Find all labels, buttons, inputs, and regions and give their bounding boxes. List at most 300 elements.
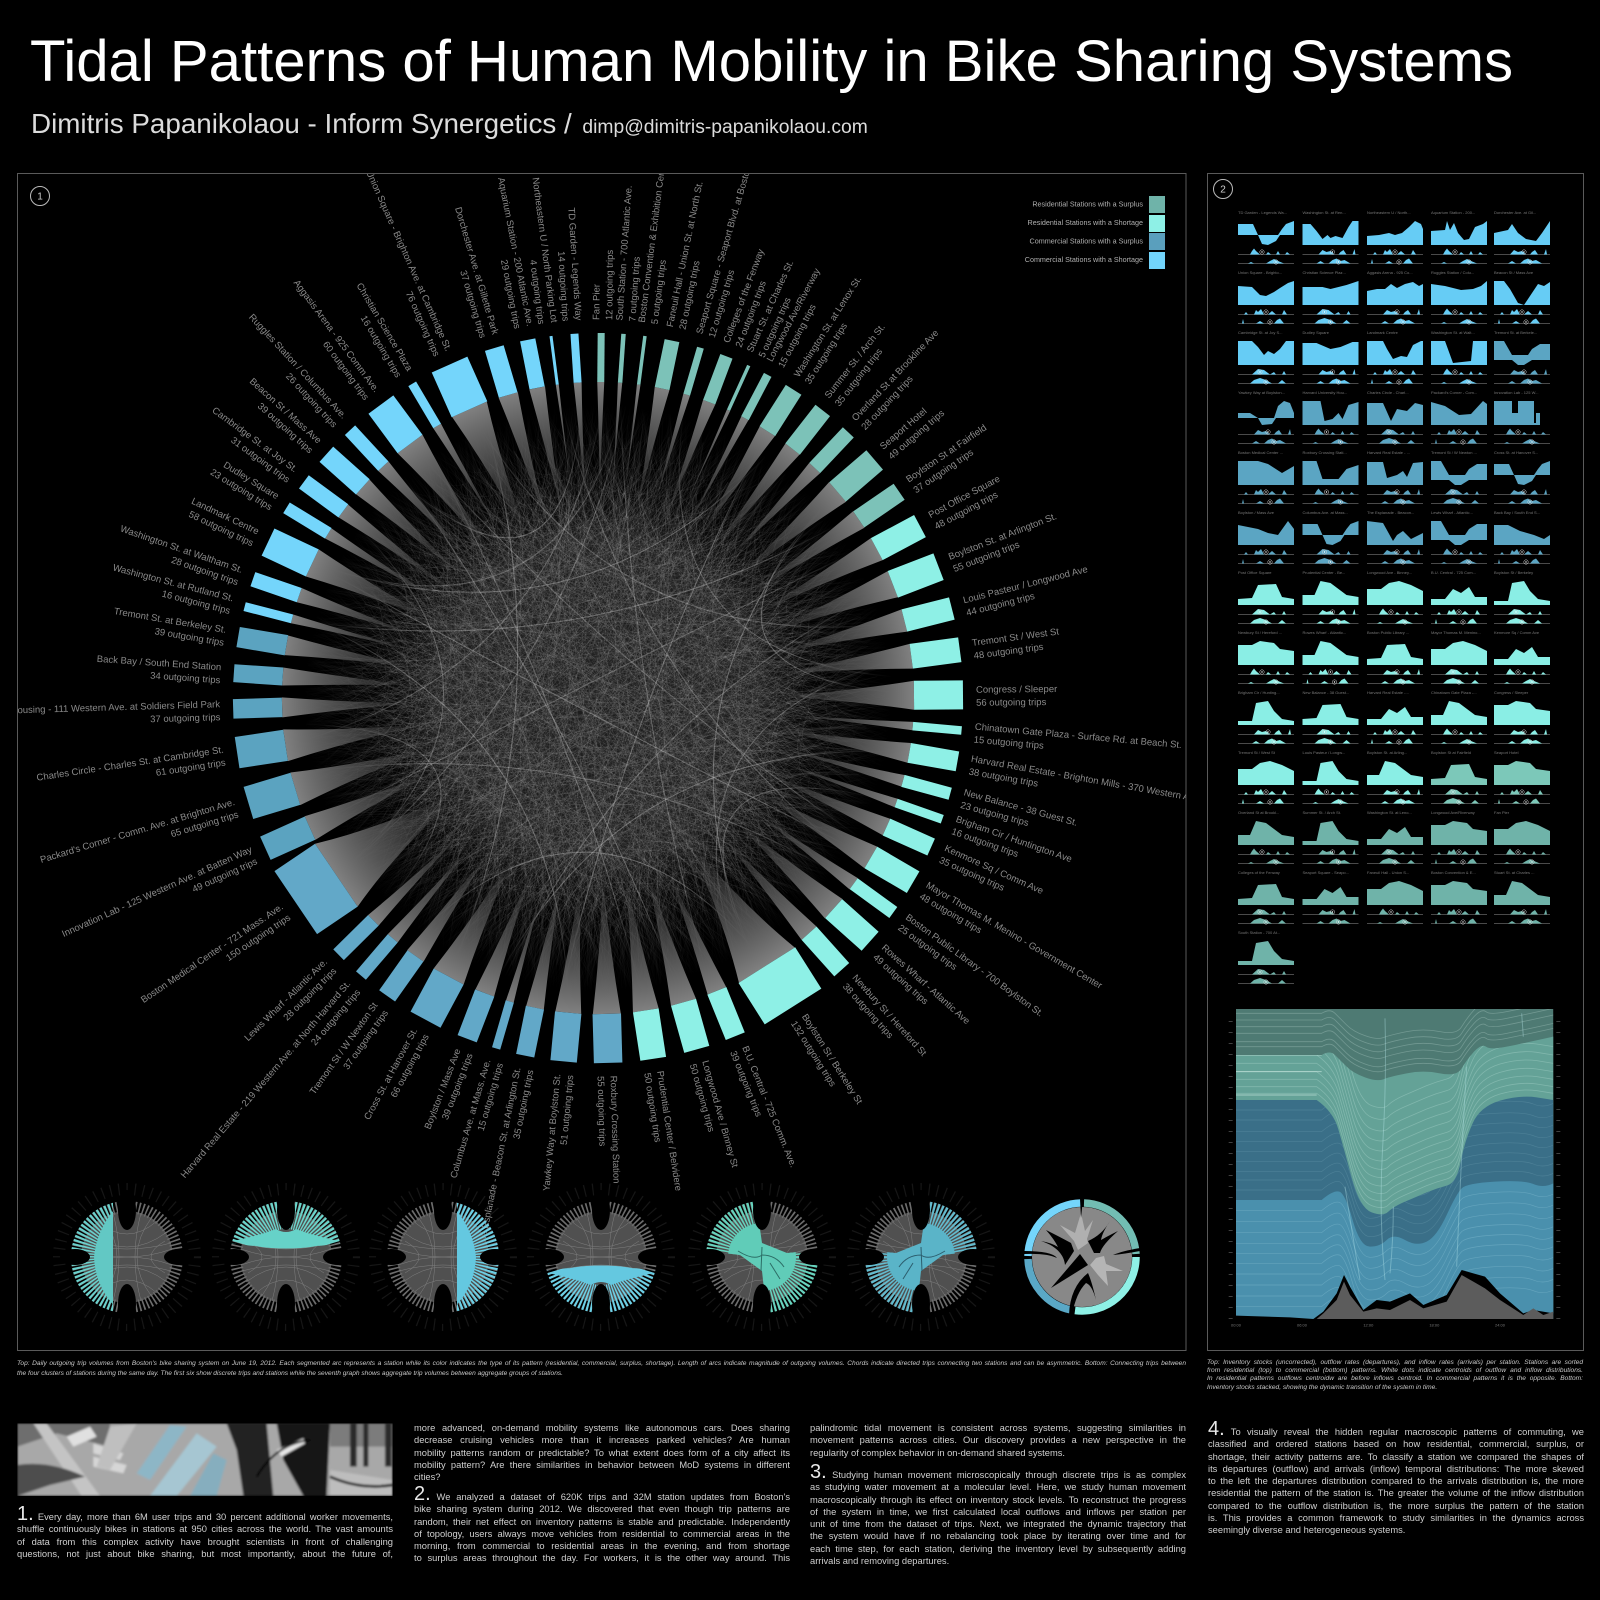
station: South Station: South Station - 700 Atlantic Ave. [614, 185, 635, 321]
small multiples row 8: Mayor Thomas M. Menino... [1431, 630, 1481, 635]
text block 1: of data from this complex activity have brought scientists in front of challenging [17, 1536, 393, 1546]
small multiples row 11: Longwood Ave/Riverway [1431, 810, 1475, 815]
text block 1 continued: mobility patterns random or predictable? To what extent does form of a city affect its [414, 1448, 790, 1458]
station: Dorchester Ave [440, 206, 518, 399]
station: Overland St: Overland St at Brookline Ave [850, 328, 941, 424]
station: Cross St [364, 968, 464, 1119]
photo: bike share dock [17, 1423, 393, 1496]
station: Boylston St / Berkeley St: 132 outgoing trips [788, 1019, 838, 1089]
small multiples row 8: Rowes Wharf - Atlantic... [1302, 630, 1346, 635]
station: Union Square: 76 outgoing trips [403, 290, 442, 359]
station: Ruggles Station: 26 outgoing trips [283, 371, 339, 430]
small multiples row 10: Boylston St. at Arling... [1367, 750, 1407, 755]
text block 1: shuffle continuously bikes in stations at 950 cities across the world. The vast amounts [17, 1524, 393, 1534]
small multiples row 9: Harvard Real Estate -... [1367, 690, 1409, 695]
small multiples row 6: Boylston / Mass Ave [1238, 510, 1275, 515]
station: Yawkey Way: Yawkey Way at Boylston St. [541, 1073, 563, 1192]
text block 4: classified and ordered stations based on how residential, commercial, surplus, or [1208, 1439, 1584, 1449]
station: Seaport Hotel: 49 outgoing trips [887, 408, 947, 462]
station: Boston Convention & Exhibition Center: 5 outgoing trips [650, 259, 669, 325]
text block 4: shortage, their activity patterns are. To classify a station we compared the shapes of [1208, 1452, 1584, 1462]
station: Louis Pasteur [902, 563, 1092, 634]
station: Tremont St / West St: Tremont St / West St [971, 627, 1060, 649]
caption: panel 1: the four clusters of stations during the same day. The first six show discrete trips and stations while the seventh graph shows aggregate trip volumes between aggregate groups of stations. [17, 1370, 563, 1376]
station: Mayor Thomas M. Menino [864, 846, 1102, 988]
small multiples row 12 [1238, 870, 1550, 924]
text block 2: of topology, users always move vehicles from residential to commercial areas in the [414, 1529, 790, 1539]
station: Packard's Corner: Packard's Corner - Comm. Ave. at Brighton Ave. [39, 797, 236, 866]
small multiples row 5: Harvard Real Estate - ... [1367, 450, 1410, 455]
legend: Commercial Stations with a Surplus [1030, 236, 1143, 246]
small multiples row 3: Washington St. at Walt... [1431, 330, 1475, 335]
station: Post Office Square: 48 outgoing trips [933, 489, 1000, 532]
text block 1 continued [414, 1423, 790, 1482]
text block 3 [810, 1461, 1186, 1566]
station: Aquarium Station: Aquarium Station - 200 Atlantic Ave. [495, 177, 535, 327]
station: Longwood Ave/Riverway [736, 266, 835, 425]
small multiples row 7: Boylston St / Berkeley [1494, 570, 1533, 575]
small multiples row 2: Union Square - Brighto... [1238, 270, 1282, 275]
text block 2: random, their net effect on inventory patterns is stable and predictable. Independently [414, 1516, 790, 1526]
station: Harvard Real Estate Brighton Mills: 38 outgoing trips [968, 767, 1039, 790]
small multiples row 4: Harvard University Hou... [1302, 390, 1347, 395]
small multiples row 10: Louis Pasteur / Longw... [1302, 750, 1345, 755]
station: Northeastern U: Northeastern U / North Parking Lot [529, 177, 559, 323]
cluster graph 2: top band [218, 1189, 354, 1325]
station: New Balance [901, 774, 1076, 826]
small multiples row 1: Aquarium Station - 200... [1431, 210, 1475, 215]
small multiples row 7: Post Office Square [1238, 570, 1272, 575]
station: Rowes Wharf: Rowes Wharf - Atlantic Ave [879, 942, 972, 1027]
text block 2 [414, 1483, 790, 1563]
station: Seaport Square: Seaport Square - Seaport Blvd. at Boston Wharf [694, 138, 762, 335]
station: Charles Circle: 61 outgoing trips [155, 757, 227, 779]
small multiples row 8: Boston Public Library ... [1367, 630, 1409, 635]
station: Aggasis Arena: 60 outgoing trips [320, 339, 371, 403]
station: Washington St. at Rutland St. [114, 564, 294, 624]
small multiples row 13 [1238, 930, 1294, 984]
text block 2: bike sharing system during 2012. We discovered that even though trip patterns are [414, 1504, 790, 1514]
station: Brigham Cir: 16 outgoing trips [950, 826, 1020, 860]
station: Fan Pier: Fan Pier [591, 284, 603, 320]
station: Dudley Square [210, 462, 332, 539]
small multiples row 6: Back Bay / South End S... [1494, 510, 1540, 515]
station: Cambridge St. at Joy St. [213, 408, 348, 518]
station: Beacon St / Mass Ave [250, 378, 370, 494]
station: Back Bay: 34 outgoing trips [150, 671, 221, 686]
station: Congress / Sleeper: Congress / Sleeper [976, 684, 1057, 696]
station: Summer St. / Arch St. [785, 322, 898, 458]
station: Boston Public Library: Boston Public Library - 700 Boylston St. [903, 912, 1045, 1019]
station: Dudley Square: Dudley Square [221, 460, 281, 502]
station: New Balance: New Balance - 38 Guest St. [963, 787, 1079, 829]
station: Roxbury Crossing Station: Roxbury Crossing Station [608, 1076, 622, 1184]
station: Boylston / Mass Ave: Boylston / Mass Ave [423, 1047, 463, 1131]
station arcs and labels [0, 137, 1203, 1251]
small multiples row 3 [1238, 330, 1550, 384]
station: Washington St. at Waltham St.: Washington St. at Waltham St. [119, 524, 244, 576]
small multiples row 4: Packard's Corner - Com... [1431, 390, 1477, 395]
station: Seaport Hotel [829, 396, 947, 503]
panel number 1 [30, 186, 50, 206]
small multiples row 9: Congress / Sleeper [1494, 690, 1529, 695]
station: Lewis Wharf [244, 915, 379, 1041]
station: Back Bay: Back Bay / South End Station [96, 654, 222, 673]
station: Longwood Ave / Binney St: 50 outgoing trips [687, 1063, 716, 1134]
small multiples row 1 [1238, 210, 1550, 264]
caption: panel 2 [1207, 1359, 1584, 1391]
station: Colleges of the Fenway: Colleges of the Fenway [722, 248, 767, 345]
small multiples row 11: Summer St. / Arch St. [1302, 810, 1341, 815]
station: Dorchester Ave: 37 outgoing trips [457, 269, 488, 340]
small multiples row 4: Yawkey Way at Boylston... [1238, 390, 1285, 395]
station: Mayor Thomas M. Menino: 48 outgoing trips [917, 891, 984, 936]
small multiples row 9 [1238, 690, 1550, 744]
legend [1025, 196, 1165, 269]
small multiples row 8: Kenmore Sq / Comm Ave [1494, 630, 1540, 635]
small multiples row 5: Boston Medical Center ... [1238, 450, 1283, 455]
station: Ruggles Station: Ruggles Station / Columbus Ave. [246, 312, 349, 421]
stacked inventory stream chart [1231, 990, 1558, 1353]
station: Union Square [346, 165, 487, 417]
small multiples row 9: Brigham Cir / Hunting... [1238, 690, 1280, 695]
panel 2: station patterns and stacked inventory [1208, 174, 1584, 1353]
station: Harvard Real Estate 219 Western: Harvard Real Estate - 219 Western Ave. at North Harvard St. [179, 979, 353, 1181]
station: Tremont St. at Berkeley St. [114, 608, 288, 656]
station: Lewis Wharf: Lewis Wharf - Atlantic Ave. [242, 957, 330, 1044]
station: Dudley Square: 23 outgoing trips [208, 467, 274, 513]
text block 3: of the system in time, we first calculated local outflows and inflows per station per [810, 1507, 1186, 1517]
station: Washington St. at Rutland St.: Washington St. at Rutland St. [111, 563, 235, 604]
station: Louis Pasteur: 44 outgoing trips [965, 591, 1036, 619]
station: Washington St. at Lenox St. [759, 274, 875, 439]
text block 3: arrivals and removing departures. [810, 1556, 949, 1566]
station: Columbus Ave: Columbus Ave. at Mass. Ave. [449, 1058, 494, 1180]
station: Cambridge St. at Joy St.: 31 outgoing trips [228, 435, 292, 486]
station: Chinatown Gate Plaza: 15 outgoing trips [973, 735, 1044, 752]
small multiples row 3: Landmark Centre [1367, 330, 1399, 335]
text block 1 continued: decrease cruising vehicles more than it increases parked vehicles? Are human [414, 1435, 790, 1445]
small multiples row 2: Beacon St / Mass Ave [1494, 270, 1534, 275]
panel number 1: 1 [37, 192, 43, 202]
cluster graph 4: bottom band [533, 1189, 669, 1325]
small multiples row 4 [1238, 390, 1550, 444]
station: Brigham Cir [894, 798, 1072, 862]
small multiples row 11: Fan Pier [1494, 810, 1510, 815]
station: Louis Pasteur: Louis Pasteur / Longwood Ave [962, 564, 1089, 606]
station: Faneuil Hall: Faneuil Hall - Union St. at North St. [665, 181, 706, 328]
station: Overland St [807, 328, 951, 478]
station: Newbury St: Newbury St / Hereford St [850, 973, 928, 1059]
text block 4: residential the pattern of the station is. The greater the volume of the inflow distribution [1208, 1488, 1584, 1498]
station: Cross St: 66 outgoing trips [389, 1032, 432, 1100]
station: TD Garden: TD Garden - Legends Way [565, 207, 584, 321]
station: Stuart St [719, 259, 808, 416]
station: Innovation Lab: 49 outgoing trips [191, 856, 259, 895]
cluster graph 1: left band [59, 1189, 195, 1325]
station: Washington St. at Lenox St.: Washington St. at Lenox St. [792, 274, 864, 379]
legend: Residential Stations with a Surplus [1032, 200, 1143, 208]
station: Tremont St / West St: 48 outgoing trips [973, 642, 1044, 662]
title: Tidal Patterns of Human Mobility in Bike Sharing Systems [30, 29, 1513, 94]
small multiples row 6 [1238, 510, 1550, 564]
station: Boylston St. at Arlington St. [888, 507, 1063, 598]
station: Landmark Centre: Landmark Centre [189, 496, 261, 537]
text block 2: 2. We analyzed a dataset of 620K trips and 32M station updates from Boston's [414, 1483, 790, 1505]
station: Harvard Real Estate 219 Western: 24 outgoing trips [309, 987, 363, 1048]
station: Ruggles Station [249, 314, 388, 471]
stacked inventory stream chart: 06:00 [1297, 1323, 1308, 1328]
station: Colleges of the Fenway [700, 247, 779, 407]
station: Harvard Real Estate Brighton Mills [908, 743, 1186, 800]
text block 1 continued: more advanced, on-demand mobility systems like autonomous cars. Does sharing [414, 1423, 790, 1433]
text block 1 continued: mobility pattern? Are there similarities in behavior between MoD systems in different [414, 1460, 790, 1470]
text block 2: morning, from commercial to residential areas in the evening, and from shortage [414, 1541, 790, 1551]
station: Charles Circle: Charles Circle - Charles St. at Cambridge St. [36, 745, 224, 784]
caption: panel 2: In residential patterns outflows centroidw are before inflows centroid. In commercial patterns it is the opposite. Bottom: [1207, 1375, 1583, 1382]
legend: Residential Stations with a Shortage [1028, 218, 1143, 227]
legend: Commercial Stations with a Shortage [1025, 255, 1143, 264]
station: Boylston St / Berkeley St: Boylston St / Berkeley St [799, 1012, 864, 1106]
small multiples row 12: Colleges of the Fenway [1238, 870, 1280, 875]
panel 1: chord diagram and cluster graphs [17, 173, 1186, 1351]
text block 3: unit of time from the dataset of trips. Next, we integrated the dynamic trajectory that [810, 1519, 1186, 1529]
station: Washington St. at Waltham St.: 28 outgoing trips [170, 555, 240, 588]
small multiples row 8 [1238, 630, 1550, 684]
station: Harvard University Housing [18, 698, 282, 724]
station: Esplanade: 35 outgoing trips [512, 1069, 536, 1140]
small multiples row 12: Faneuil Hall - Union S... [1367, 870, 1409, 875]
small multiples row 5: Cross St. at Hanover S... [1494, 450, 1538, 455]
station: Aquarium Station [482, 177, 547, 391]
station: Seaport Square: 12 outgoing trips [707, 268, 737, 339]
small multiples row 4: Charles Circle - Charl... [1367, 390, 1409, 395]
station: Faneuil Hall [652, 181, 718, 391]
text block 2 continued: regularity of complex behavior in on-demand shared systems. [810, 1448, 1065, 1458]
station: Colleges of the Fenway: 24 outgoing trips [734, 279, 769, 349]
station: Yawkey Way: 51 outgoing trips [559, 1074, 576, 1146]
text block 3: as studying water movement at a molecular level. Here, we study human movement [810, 1482, 1186, 1492]
station: Cross St: Cross St. at Hanover St. [362, 1026, 420, 1122]
text block 3: the system would have if no rebalancing took place by iterating over time and for [810, 1531, 1186, 1541]
small multiples row 7: B.U. Central - 725 Com... [1431, 570, 1476, 575]
station: Landmark Centre: 58 outgoing trips [187, 509, 255, 549]
small multiples row 6: Columbus Ave. at Mass... [1302, 510, 1348, 515]
station: Charles Circle [37, 730, 288, 780]
station: Prudential Center: 50 outgoing trips [641, 1072, 663, 1143]
station: Northeastern U [517, 177, 567, 386]
caption: panel 2: Top: Inventory stocks (uncorrected), outflow rates (departures), and inflow rates (arrivals) per station. Stations are sorted [1207, 1359, 1583, 1366]
small multiples row 4: Innovation Lab - 125 W... [1494, 390, 1538, 395]
station: Washington St. at Waltham St. [122, 525, 302, 602]
station: Boston Convention & Exhibition Center [629, 159, 682, 386]
station: Harvard Real Estate Brighton Mills: Harvard Real Estate - Brighton Mills - 370 Western Ave. [970, 754, 1203, 805]
stacked inventory stream chart: 24:00 [1495, 1323, 1506, 1328]
station: Innovation Lab: Innovation Lab - 125 Western Ave. at Batten Way [60, 844, 254, 940]
small multiples row 7: Longwood Ave - Binney... [1367, 570, 1412, 575]
station: Boylston St. at Arlington St.: 55 outgoing trips [952, 539, 1021, 575]
small multiples row 3: Dudley Square [1302, 330, 1330, 335]
station: Tremont St / W Newton St: Tremont St / W Newton St [308, 1001, 380, 1097]
station: Kenmore Sq [882, 818, 1042, 894]
station: Congress / Sleeper [914, 679, 1057, 710]
small multiples row 7 [1238, 570, 1550, 624]
station: Landmark Centre [188, 498, 319, 576]
station: Rowes Wharf: 49 outgoing trips [870, 952, 930, 1007]
text block 4: 4. To visually reveal the hidden regular macroscopic patterns of commuting, we [1208, 1418, 1584, 1440]
station: Washington St. at Rutland St.: 16 outgoing trips [161, 589, 232, 617]
station: Dorchester Ave: Dorchester Ave. at Gillette Park [452, 206, 500, 336]
small multiples row 11 [1238, 810, 1550, 864]
station: B.U. Central: 39 outgoing trips [727, 1049, 764, 1119]
station: Yawkey Way [542, 1011, 582, 1190]
small multiples row 3: Cambridge St. at Joy S... [1238, 330, 1282, 335]
station: Northeastern U: 4 outgoing trips [527, 259, 546, 325]
station: Longwood Ave/Riverway: 15 outgoing trips [776, 302, 819, 370]
station: Brigham Cir: Brigham Cir / Huntington Ave [954, 814, 1073, 865]
station: Faneuil Hall: 28 outgoing trips [678, 259, 703, 331]
text block 4: compared to the outflow distribution is, the more surplus the pattern of the station [1208, 1500, 1584, 1510]
text block 2 continued: movement patterns across cities. Our discovery provides a new perspective in the [810, 1435, 1186, 1445]
station: Summer St. / Arch St.: 35 outgoing trips [833, 346, 885, 409]
station: TD Garden: 14 outgoing trips [555, 251, 571, 322]
station: Kenmore Sq: 35 outgoing trips [937, 855, 1006, 894]
station: Harvard Real Estate 219 Western [179, 932, 403, 1189]
station: Columbus Ave: 15 outgoing trips [476, 1062, 506, 1132]
station: Esplanade: The Esplanade - Beacon St. at Arlington St. [476, 1066, 524, 1248]
small multiples row 8: Newbury St / Hereford ... [1238, 630, 1282, 635]
station: Innovation Lab [62, 816, 316, 937]
small multiples row 3: Tremont St. at Berkele... [1494, 330, 1537, 335]
station: Aquarium Station: 29 outgoing trips [498, 259, 522, 330]
station: Congress / Sleeper: 56 outgoing trips [976, 697, 1047, 709]
stacked inventory stream chart: 18:00 [1429, 1323, 1440, 1328]
station: Boylston St at Fairfield: Boylston St at Fairfield [904, 422, 989, 485]
cluster graph 6: diagonal band [853, 1189, 989, 1325]
small multiples row 5: Tremont St / W Newton ... [1431, 450, 1477, 455]
station: Washington St. at Lenox St.: 35 outgoing trips [803, 321, 850, 386]
small multiples row 12: Seaport Square - Seapo... [1302, 870, 1349, 875]
station: Summer St. / Arch St.: Summer St. / Arch St. [823, 322, 888, 401]
station: Aggasis Arena: Aggasis Arena - 925 Comm Ave. [291, 278, 381, 395]
station: Fan Pier [591, 249, 616, 382]
station: South Station [610, 185, 648, 384]
small multiples row 12: Boston Convention & E... [1431, 870, 1476, 875]
small multiples row 5: Roxbury Crossing Stati... [1302, 450, 1347, 455]
text block 1 continued: cities? [414, 1472, 440, 1482]
station: Union Square: Union Square - Brighton Ave. at Cambridge St. [363, 169, 453, 353]
station: Packard's Corner: 65 outgoing trips [170, 809, 240, 840]
chord network [282, 382, 914, 1014]
small multiples row 11: Overland St at Brookl... [1238, 810, 1279, 815]
small multiples row 6: The Esplanade - Beacon... [1367, 510, 1414, 515]
station: Tremont St. at Berkeley St.: Tremont St. at Berkeley St. [113, 606, 227, 636]
small multiples row 2 [1238, 270, 1550, 324]
station: Rowes Wharf [825, 899, 969, 1024]
text block 4: to the left the departures distribution compared to the arrivals distribution is, the more [1208, 1476, 1584, 1486]
station: Roxbury Crossing Station [592, 1014, 622, 1183]
station: Roxbury Crossing Station: 55 outgoing trips [595, 1076, 608, 1147]
station: Fan Pier: 12 outgoing trips [604, 250, 616, 320]
station: Boston Convention & Exhibition Center: Boston Convention & Exhibition Center [637, 159, 669, 323]
station: Boylston St. at Arlington St.: Boylston St. at Arlington St. [947, 511, 1058, 563]
station: TD Garden [552, 207, 588, 384]
station: B.U. Central [707, 987, 794, 1168]
small multiples row 10: Boylston St at Fairfield [1431, 750, 1471, 755]
text block 4: is. This provides a common framework to study similarities in the dynamics across [1208, 1513, 1584, 1523]
text block 2 continued: palindromic tidal movement is consistent across systems, suggesting similarities in [810, 1423, 1186, 1433]
cluster graph 3: right band [375, 1189, 511, 1325]
small multiples row 9: New Balance - 38 Guest... [1302, 690, 1349, 695]
station: Boston Medical Center: 150 outgoing trips [224, 912, 293, 964]
station: Seaport Square [677, 137, 775, 399]
cluster graph 5: diagonal band [694, 1189, 830, 1325]
station: Tremont St / W Newton St: 37 outgoing trips [341, 1008, 391, 1072]
station: Boston Medical Center: Boston Medical Center - 721 Mass. Ave. [139, 902, 286, 1006]
station: Boylston St at Fairfield [853, 422, 996, 531]
station: Aggasis Arena [279, 275, 422, 453]
text block 4: seemingly diverse and heterogeneous systems. [1208, 1525, 1405, 1535]
station: Beacon St / Mass Ave: Beacon St / Mass Ave [247, 376, 323, 446]
station: Boylston St at Fairfield: 37 outgoing trips [912, 447, 976, 496]
station: Christian Science Plaza [342, 281, 446, 433]
small multiples row 12: Stuart St. at Charles ... [1494, 870, 1534, 875]
station: Tremont St. at Berkeley St.: 39 outgoing trips [154, 626, 225, 649]
text block 3: macroscopically through its effect on inventory stock levels. To reconstruct the progress [810, 1494, 1186, 1504]
text block 4: its departures (outflow) and arrivals (inflow) temporal distributions: The more skewed [1208, 1464, 1584, 1474]
station: Longwood Ave/Riverway: Longwood Ave/Riverway [765, 267, 823, 364]
stacked inventory stream chart: 12:00 [1363, 1323, 1374, 1328]
small multiples row 13: South Station - 700 At... [1238, 930, 1280, 935]
small multiples row 10 [1238, 750, 1550, 804]
station: Boylston / Mass Ave [424, 989, 494, 1130]
station: Cambridge St. at Joy St.: Cambridge St. at Joy St. [210, 405, 299, 475]
caption: panel 2: from residential (top) to commercial (bottom) patterns. White dots indicate centroids of outflow and inflow distributions. [1207, 1367, 1583, 1374]
stacked inventory stream chart: 00:00 [1231, 1323, 1242, 1328]
station: Mayor Thomas M. Menino: Mayor Thomas M. Menino - Government Center [924, 880, 1104, 992]
station: Esplanade [482, 1006, 544, 1238]
station: Prudential Center: Prudential Center / Belvidere [654, 1070, 683, 1192]
small multiples row 5 [1238, 450, 1550, 504]
station: Christian Science Plaza: 16 outgoing trips [358, 314, 403, 380]
station: Stuart St: 5 outgoing trips [757, 296, 794, 360]
text block 4 [1208, 1418, 1584, 1535]
text block 3: 3. Studying human movement microscopically through discrete trips is as complex [810, 1461, 1186, 1483]
text block 2: to surplus areas throughout the day. For workers, it is the other way around. This [414, 1553, 790, 1563]
station: Seaport Hotel: Seaport Hotel [878, 406, 929, 452]
small multiples row 10: Seaport Hotel [1494, 750, 1519, 755]
aggregate cluster graph [1024, 1199, 1140, 1315]
subtitle: author and email: Dimitris Papanikolaou - Inform Synergetics / dimp@dimitris-papanikolaou.com [31, 108, 868, 139]
station: New Balance: 23 outgoing trips [959, 800, 1030, 829]
station: Boston Medical Center [140, 844, 358, 1003]
small multiples row 1: Northeastern U / North... [1367, 210, 1411, 215]
panel number 2 [1214, 180, 1232, 198]
small multiples row 1: Washington St. at Ren... [1302, 210, 1346, 215]
small multiples row 1: TD Garden - Legends Wa... [1238, 210, 1287, 215]
station: Boylston / Mass Ave: 39 outgoing trips [440, 1052, 476, 1121]
station: Packard's Corner [40, 772, 300, 863]
small multiples row 1: Dorchester Ave. at Gil... [1494, 210, 1536, 215]
station: Lewis Wharf: 28 outgoing trips [281, 966, 339, 1023]
small multiples row 9: Chinatown Gate Plaza -... [1431, 690, 1477, 695]
station: Boston Public Library: 25 outgoing trips [896, 923, 959, 973]
station: Newbury St [802, 926, 926, 1056]
station: Christian Science Plaza: Christian Science Plaza [354, 281, 414, 373]
station: Stuart St: Stuart St. at Charles St. [745, 259, 796, 354]
station: Post Office Square: Post Office Square [927, 474, 1002, 521]
station: Overland St: 28 outgoing trips [859, 374, 916, 433]
